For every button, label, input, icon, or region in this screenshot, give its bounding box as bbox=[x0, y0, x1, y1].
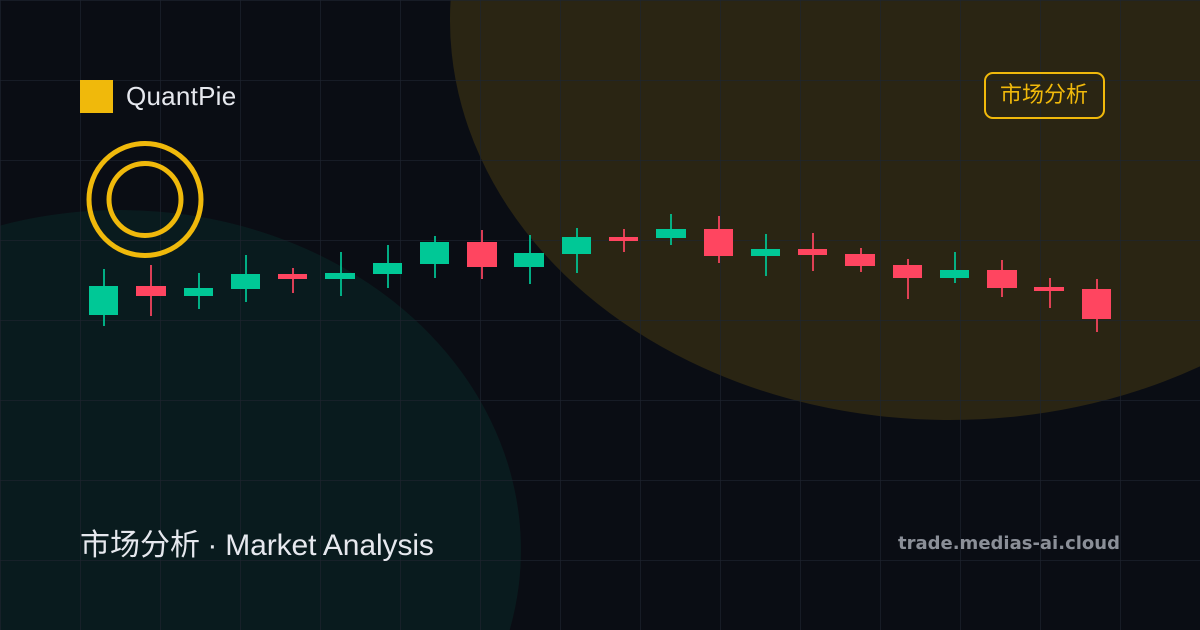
concentric ring icon bbox=[89, 144, 201, 256]
footer url: trade.medias-ai.cloud bbox=[898, 533, 1120, 554]
green background ellipse bbox=[0, 210, 521, 630]
footer title: Market Analysis bbox=[217, 529, 434, 562]
tag: market analysis: 市场分析 bbox=[1000, 82, 1088, 107]
candlestick chart bbox=[89, 214, 1111, 332]
brand name: QuantPie bbox=[126, 81, 236, 111]
yellow background ellipse bbox=[450, 0, 1200, 420]
footer title: 市场分析 bbox=[80, 529, 200, 562]
tag: market analysis bbox=[985, 73, 1104, 118]
logo mark bbox=[80, 80, 113, 113]
footer title: · bbox=[199, 529, 217, 562]
